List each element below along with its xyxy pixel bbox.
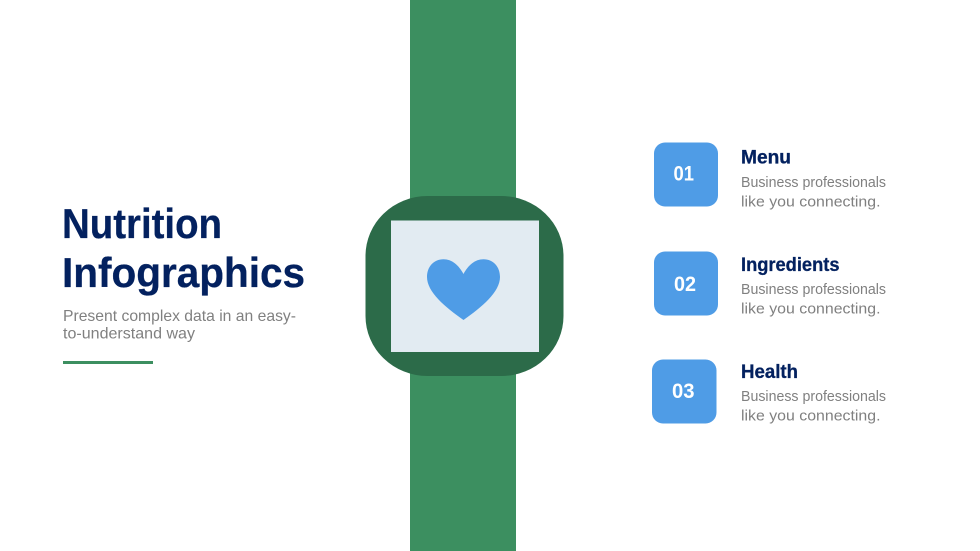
item description: like you connecting. [741, 300, 880, 318]
item description [741, 174, 886, 210]
title [62, 200, 305, 296]
title: Infographics [62, 249, 305, 296]
title: Nutrition [62, 200, 222, 247]
accent underline [63, 361, 153, 364]
item heading: Menu: Menu [741, 148, 791, 168]
panel: item 01 menu [654, 142, 886, 210]
panel: item 02 ingredients [654, 252, 886, 318]
subtitle: Present complex data in an easy- [63, 308, 296, 325]
number badge 03 [652, 360, 716, 424]
subtitle: to-understand way [63, 326, 195, 342]
item description: like you connecting. [741, 194, 880, 210]
icon: heart [427, 259, 500, 320]
number badge 02: 02 [674, 273, 696, 296]
item description: Business professionals [741, 388, 886, 405]
item description [741, 281, 886, 318]
panel: title block [62, 200, 305, 364]
watch screen [391, 220, 539, 352]
watch body [366, 196, 564, 376]
item description: Business professionals [741, 174, 886, 191]
subtitle [63, 308, 296, 342]
number badge 03: 03 [672, 380, 694, 403]
number badge 01: 01 [674, 162, 694, 186]
item heading: Health: Health [741, 362, 798, 383]
panel: item 03 health [652, 360, 886, 424]
item description: Business professionals [741, 281, 886, 298]
item heading: Ingredients: Ingredients [741, 255, 840, 276]
watch strap [410, 0, 516, 551]
number badge 02 [654, 252, 718, 316]
item description: like you connecting. [741, 408, 880, 424]
icon: smartwatch [366, 0, 564, 551]
number badge 01 [654, 142, 718, 206]
item description [741, 388, 886, 424]
